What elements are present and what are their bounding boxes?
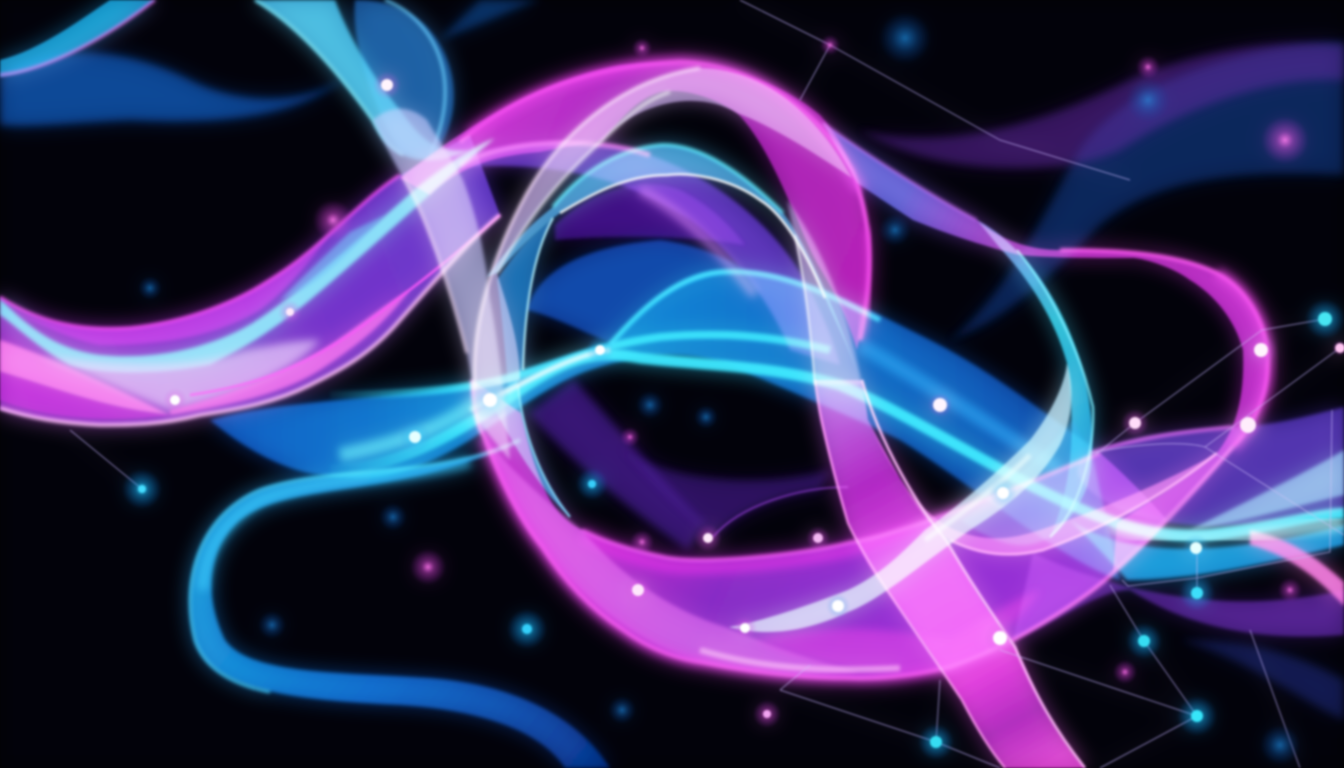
thin pink loop ribbon (868, 420, 1217, 554)
purple arch band inside the loop (460, 142, 840, 365)
descending magenta strip (815, 380, 1085, 768)
top-left blue ribbon (0, 0, 540, 126)
inner blue ring sliver (490, 218, 570, 517)
right side ribbons (1013, 407, 1344, 720)
lower-left blue ribbon (190, 440, 610, 768)
dark interior washes inside the loop (527, 184, 848, 550)
bottom purple fill of the loop (472, 380, 1233, 678)
pale white ribbon crossing the lower loop (729, 363, 1071, 632)
faded ribbons top right (860, 42, 1344, 340)
cyan crescent ribbon (960, 220, 1093, 545)
top cyan ribbon and vertical pale ribbon (255, 0, 510, 460)
cyan middle wave ribbon (210, 270, 1344, 580)
pale arch ribbon (474, 68, 852, 390)
left magenta and purple band (0, 135, 500, 425)
top right magenta ribbon loop (823, 123, 1268, 573)
pale descending band under the arch (787, 200, 862, 385)
top arch magenta ribbon (400, 62, 870, 350)
inner cyan arch ribbon (487, 145, 862, 385)
